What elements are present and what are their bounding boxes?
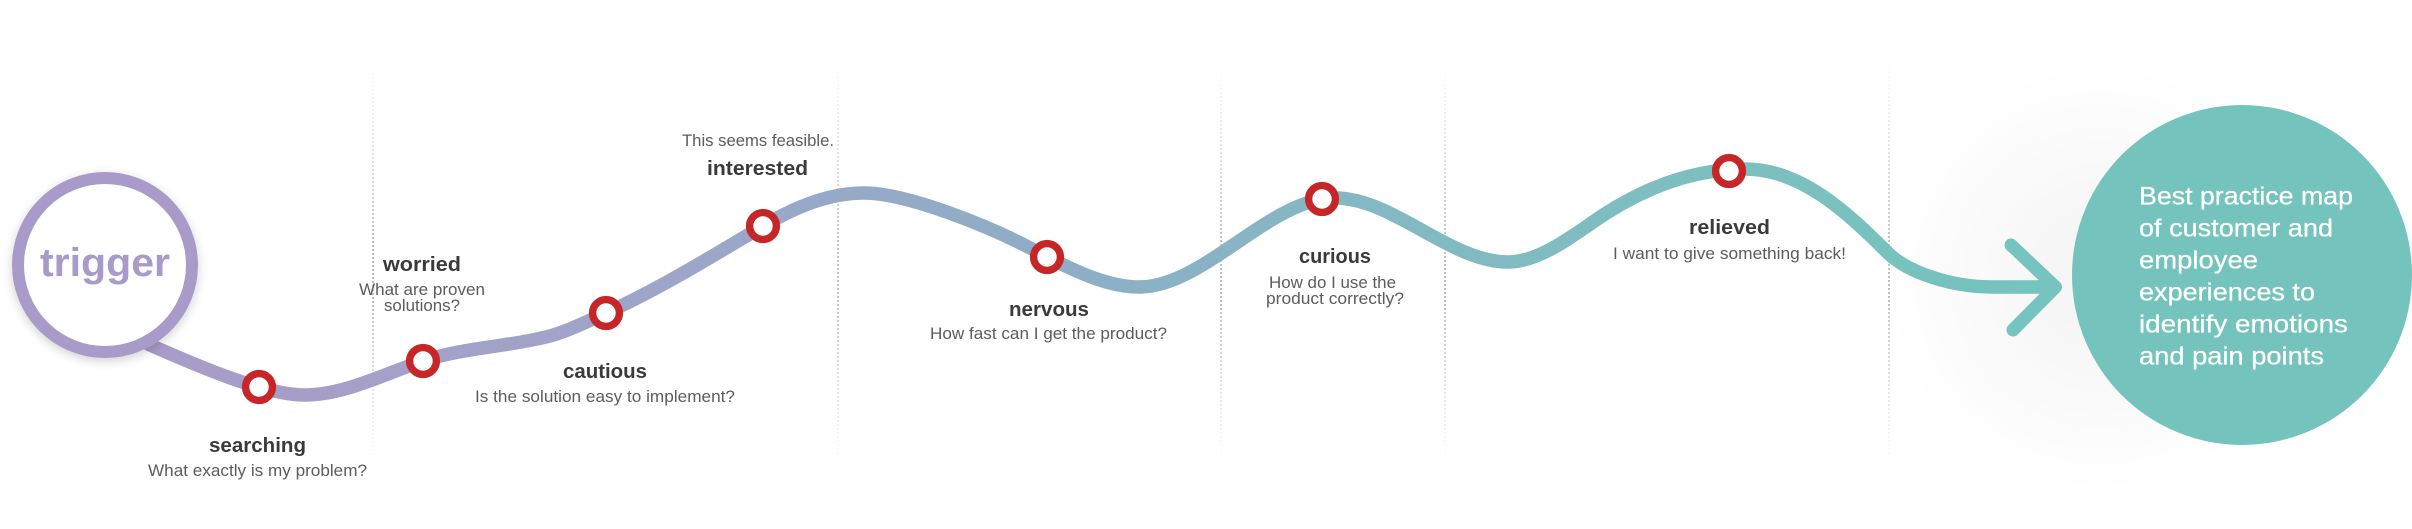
label: worried <box>359 253 485 315</box>
outcome text: and pain points <box>2139 342 2324 370</box>
label: relieved <box>1613 216 1846 263</box>
journey curve <box>138 169 2056 395</box>
node: worried <box>410 348 436 374</box>
label: nervous: How fast can I get the product? <box>930 325 1167 343</box>
label: interested <box>682 132 834 180</box>
label: curious: product correctly? <box>1266 290 1404 308</box>
label: cautious <box>475 360 735 406</box>
label: cautious: Is the solution easy to implement? <box>475 388 735 406</box>
outcome text: employee <box>2139 246 2258 274</box>
label: curious <box>1266 245 1404 308</box>
node: interested <box>750 213 776 239</box>
outcome text: identify emotions <box>2139 310 2348 338</box>
node: searching <box>246 374 272 400</box>
outcome text: Best practice map <box>2139 182 2353 210</box>
label: nervous: nervous <box>1009 298 1089 321</box>
outcome text: of customer and <box>2139 214 2333 242</box>
background glow behind outcome circle <box>1885 63 2315 493</box>
label: searching <box>148 434 367 480</box>
label: worried: What are proven <box>359 281 485 299</box>
label: interested: interested <box>707 157 808 180</box>
trigger label: trigger <box>40 241 170 285</box>
node: curious <box>1309 186 1335 212</box>
node: relieved <box>1716 158 1742 184</box>
node: cautious <box>593 300 619 326</box>
label: interested: This seems feasible. <box>682 132 834 150</box>
label: searching: searching <box>209 434 306 457</box>
node: nervous <box>1034 244 1060 270</box>
outcome text <box>2139 182 2353 370</box>
label: searching: What exactly is my problem? <box>148 462 367 480</box>
outcome circle <box>2072 105 2412 445</box>
label: curious: curious <box>1299 245 1371 268</box>
label: relieved: relieved <box>1689 216 1770 239</box>
arrow head <box>2011 245 2056 330</box>
label: curious: How do I use the <box>1269 274 1396 292</box>
label: worried: solutions? <box>384 297 460 315</box>
label: worried: worried <box>382 253 461 276</box>
label: nervous <box>930 298 1167 343</box>
trigger circle <box>18 178 192 352</box>
outcome text: experiences to <box>2139 278 2315 306</box>
label: relieved: I want to give something back! <box>1613 245 1846 263</box>
label: cautious: cautious <box>563 360 647 383</box>
